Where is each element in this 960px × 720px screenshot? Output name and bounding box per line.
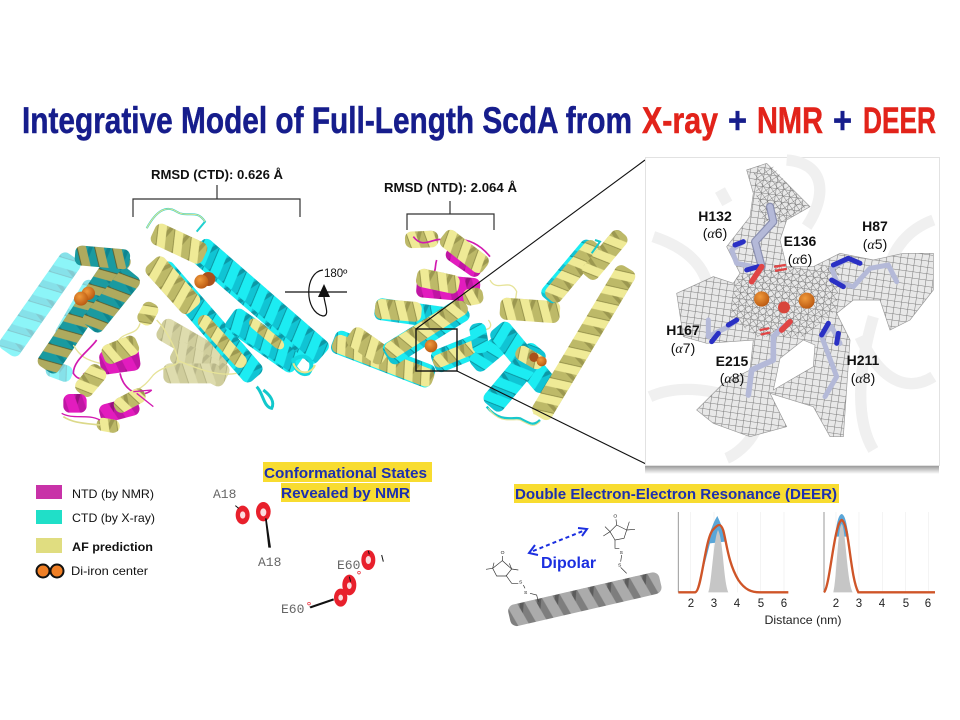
legend: CTD (by X-ray) [72, 511, 155, 525]
DEER distance distribution charts: 5 [903, 598, 909, 610]
iron spheres right view [425, 340, 547, 366]
RMSD CTD label and bracket: RMSD (CTD): 0.626 Å [151, 167, 283, 182]
rotation symbol 180 degrees [285, 268, 348, 316]
NMR peak spectrum [213, 487, 383, 617]
NMR peak spectrum: E60 [337, 558, 360, 573]
iron and oxygen spheres [754, 291, 815, 313]
title: X-ray [642, 100, 719, 141]
iron spheres left view [74, 272, 215, 306]
NMR peak spectrum: E60 [281, 602, 304, 617]
residue labels: (α6) [788, 251, 812, 268]
RMSD NTD label and bracket: RMSD (NTD): 2.064 Å [384, 180, 517, 195]
DEER distance distribution charts: 4 [734, 598, 741, 610]
residue labels: (α5) [863, 236, 887, 253]
residue labels: (α8) [720, 370, 744, 387]
RMSD NTD label and bracket [384, 180, 517, 230]
residue labels: H167 [666, 322, 700, 338]
zoom box and connecting lines [416, 160, 646, 464]
title: + [833, 100, 852, 141]
NMR peak spectrum: A18 [213, 487, 236, 502]
legend: NTD (by NMR) [72, 487, 154, 501]
heading: conformational states: Conformational States [264, 465, 427, 482]
DEER helix with spin labels: S [519, 579, 523, 585]
DEER distance distribution charts: 4 [879, 598, 886, 610]
electron density mesh [677, 163, 933, 437]
DEER helix with spin labels: S [524, 590, 528, 596]
dipolar arrow and label: Dipolar [541, 555, 596, 572]
NMR peak spectrum: A18 [258, 555, 281, 570]
residue labels: E215 [716, 353, 749, 369]
residue labels: H87 [862, 218, 888, 234]
protein structure: left view [0, 209, 332, 434]
DEER distance distribution charts: Distance (nm) [764, 613, 842, 627]
heading: conformational states: Revealed by NMR [281, 485, 410, 502]
residue labels: H132 [698, 208, 732, 224]
DEER helix with spin labels [486, 513, 663, 627]
residue labels: (α7) [671, 340, 695, 357]
NTD magenta and yellow helices [62, 334, 153, 434]
DEER distance distribution charts: 6 [925, 598, 931, 610]
DEER distance distribution charts [678, 512, 935, 627]
DEER distance distribution charts: 5 [758, 598, 764, 610]
residue labels: E136 [784, 233, 817, 249]
heading: DEER: Double Electron-Electron Resonance (DEER) [515, 487, 837, 503]
heading: conformational states [263, 462, 432, 502]
title: Integrative Model of Full-Length ScdA from [22, 100, 632, 141]
dipolar arrow and label [529, 528, 596, 572]
residue labels: (α6) [703, 225, 727, 242]
legend: AF prediction [72, 540, 153, 554]
rotation symbol 180 degrees: 180º [324, 268, 348, 280]
residue labels [666, 208, 888, 387]
title: + [728, 100, 747, 141]
RMSD CTD label and bracket [133, 167, 300, 217]
DEER distance distribution charts: 2 [688, 598, 694, 610]
protein structure: right view [329, 227, 638, 425]
legend: Di-iron center [71, 564, 148, 578]
DEER distance distribution charts: 2 [833, 598, 839, 610]
title: NMR [757, 100, 823, 141]
residue labels: (α8) [851, 370, 875, 387]
DEER helix with spin labels: S [618, 563, 622, 569]
legend [36, 485, 155, 578]
DEER distance distribution charts: 6 [781, 598, 787, 610]
DEER distance distribution charts: 3 [711, 598, 717, 610]
panel: active site density map [645, 158, 940, 474]
NTD helices right view [405, 227, 492, 307]
side-chain sticks [708, 207, 897, 397]
DEER helix with spin labels: O [613, 513, 617, 519]
DEER helix with spin labels: S [620, 550, 624, 556]
DEER distance distribution charts: 3 [856, 598, 862, 610]
residue labels: H211 [847, 352, 880, 368]
DEER helix with spin labels: O [501, 550, 505, 556]
